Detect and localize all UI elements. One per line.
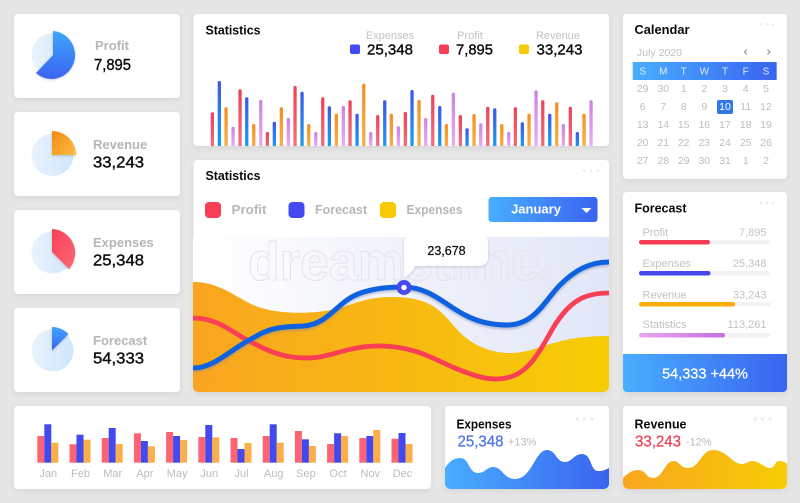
month labels: Dec [393,468,413,480]
month labels: Jan [39,468,57,480]
revenue value [635,434,712,450]
profit text [94,38,131,74]
row: statistics: Statistics [642,319,687,331]
legend: revenue: 33,243 [536,42,582,58]
date grid: 23 [698,137,710,149]
row: expenses: 25,348 [733,258,766,270]
expenses value: 25,348 [458,434,504,450]
forecast text: 54,333 [93,350,144,368]
line: profit [193,293,609,379]
expenses value [458,434,537,450]
date grid: 22 [678,137,690,149]
date grid: 29 [637,83,649,95]
expenses text [93,235,154,270]
month labels: Nov [361,468,381,480]
legend: expenses: Expenses [406,202,462,217]
date grid: 28 [657,155,669,167]
row: profit [639,227,770,244]
panel: forecast summary [14,308,180,392]
bar chart: statistics [211,81,593,148]
date grid: 5 [763,83,769,95]
panel: revenue trend [623,406,787,489]
row: statistics [639,319,770,338]
bars: profit [37,431,399,463]
date grid: 6 [640,101,646,113]
menu dots [760,202,774,204]
month labels: Oct [330,468,347,480]
date grid: 21 [657,137,669,149]
legend: revenue [519,30,582,58]
date grid: 27 [637,155,649,167]
heading: revenue: Revenue [634,418,686,432]
date grid: 12 [760,101,772,113]
date grid: 14 [657,119,669,131]
month labels: Mar [103,468,123,480]
bars: expenses [51,430,413,463]
line shadow [193,264,609,370]
tooltip: 23,678 [427,244,466,258]
date grid: 31 [719,155,731,167]
profit text: Profit [95,38,130,53]
row: expenses: Expenses [642,258,691,270]
menu dots [576,417,594,421]
legend: expenses: 25,348 [367,42,413,58]
bars: forecast [44,424,406,463]
weekday header: W [700,66,710,78]
date grid: 20 [637,137,649,149]
date grid: 19 [760,119,772,131]
date grid: 29 [678,155,690,167]
month labels: May [167,468,188,480]
tooltip [403,234,488,278]
heading: statistics: Statistics [206,169,260,183]
legend: profit [439,30,493,58]
line and area chart [193,232,609,392]
month labels: Jul [234,468,249,480]
heading: calendar: Calendar [634,23,690,37]
date grid: 18 [740,119,752,131]
watermark: dreamstime [248,232,540,292]
row: profit: 7,895 [739,227,766,239]
legend: expenses [350,30,415,58]
month label: July 2020 [637,47,682,59]
weekday header: F [743,66,749,78]
date grid: 30 [698,155,710,167]
footer total [623,354,787,392]
area: expenses [193,282,609,392]
legend: profit: 7,895 [456,42,493,58]
revenue text: 33,243 [93,154,144,172]
panel: profit [14,14,180,98]
profit text: 7,895 [94,57,131,74]
date grid: 1 [681,83,687,95]
month labels [39,468,413,480]
panel: calendar [623,14,787,179]
revenue text: Revenue [93,137,147,152]
expenses text: 25,348 [93,252,144,270]
date grid: 2 [701,83,707,95]
date grid: 24 [719,137,731,149]
date grid [637,83,772,167]
forecast text [93,333,148,368]
date grid: 16 [698,119,710,131]
revenue text [93,137,147,172]
month labels: Apr [136,468,154,480]
row: revenue: 33,243 [733,290,766,302]
line: forecast [193,262,609,368]
row: revenue: Revenue [642,290,687,302]
weekday header: S [763,66,770,78]
footer total: 54,333 +44% [662,366,748,382]
row: statistics: 113,261 [728,319,766,331]
expenses value: +13% [508,436,537,448]
heading: statistics: Statistics [206,24,260,38]
panel: main statistics [193,160,609,392]
row: revenue [639,290,770,306]
menu dots [760,23,774,26]
panel: expenses [14,210,180,294]
icon: expenses pie [32,229,75,274]
legend: forecast [288,202,368,218]
dropdown: January [488,197,598,222]
month labels: Sep [296,468,316,480]
dropdown: January: January [511,202,562,216]
watermark [250,240,552,281]
icon: profit pie [32,31,76,79]
panel: top statistics [194,14,609,148]
weekday header: M [659,66,667,78]
expenses text: Expenses [93,235,154,250]
date grid: 13 [637,119,649,131]
menu dots [753,417,772,421]
heading: expenses: Expenses [456,418,512,432]
date grid: 17 [719,119,731,131]
date grid: 7 [660,101,666,113]
date grid: 1 [743,155,749,167]
legend: profit: Profit [457,30,483,42]
heading: forecast: Forecast [634,202,687,216]
grouped bar chart [37,424,413,480]
icon: forecast pie [32,327,74,372]
panel: revenue [14,112,180,196]
weekday header: T [681,66,687,78]
date grid: 26 [760,137,772,149]
weekday header [633,62,777,80]
panel: expenses trend [445,406,609,489]
month labels: Jun [200,468,218,480]
menu dots [583,169,599,172]
revenue value: -12% [686,436,712,448]
date grid: 8 [681,101,687,113]
legend: profit [205,202,267,218]
date grid: 15 [678,119,690,131]
panel: monthly bars [14,406,431,489]
weekday header: S [639,66,646,78]
row: expenses [639,258,770,276]
date grid: 2 [763,155,769,167]
month labels: Feb [71,468,90,480]
date grid: 3 [722,83,728,95]
month arrows [744,50,770,54]
date grid: 30 [657,83,669,95]
panel: forecast [623,192,787,392]
row: profit: Profit [642,227,668,239]
date grid: 11 [740,101,751,113]
forecast text: Forecast [93,333,148,348]
date grid: 9 [701,101,707,113]
marker [396,280,412,295]
legend: expenses [380,202,462,218]
legend: profit: Profit [232,202,267,217]
date grid: 10 [719,101,731,113]
date grid: 25 [740,137,752,149]
legend: expenses: Expenses [366,30,415,42]
legend: revenue: Revenue [536,30,580,42]
weekday header: T [722,66,728,78]
date grid: 4 [743,83,749,95]
icon: revenue pie [32,131,76,176]
legend: forecast: Forecast [315,202,368,217]
area chart: expenses [445,450,609,489]
revenue value: 33,243 [635,434,681,450]
area chart: revenue [623,450,787,489]
month labels: Aug [264,468,283,480]
